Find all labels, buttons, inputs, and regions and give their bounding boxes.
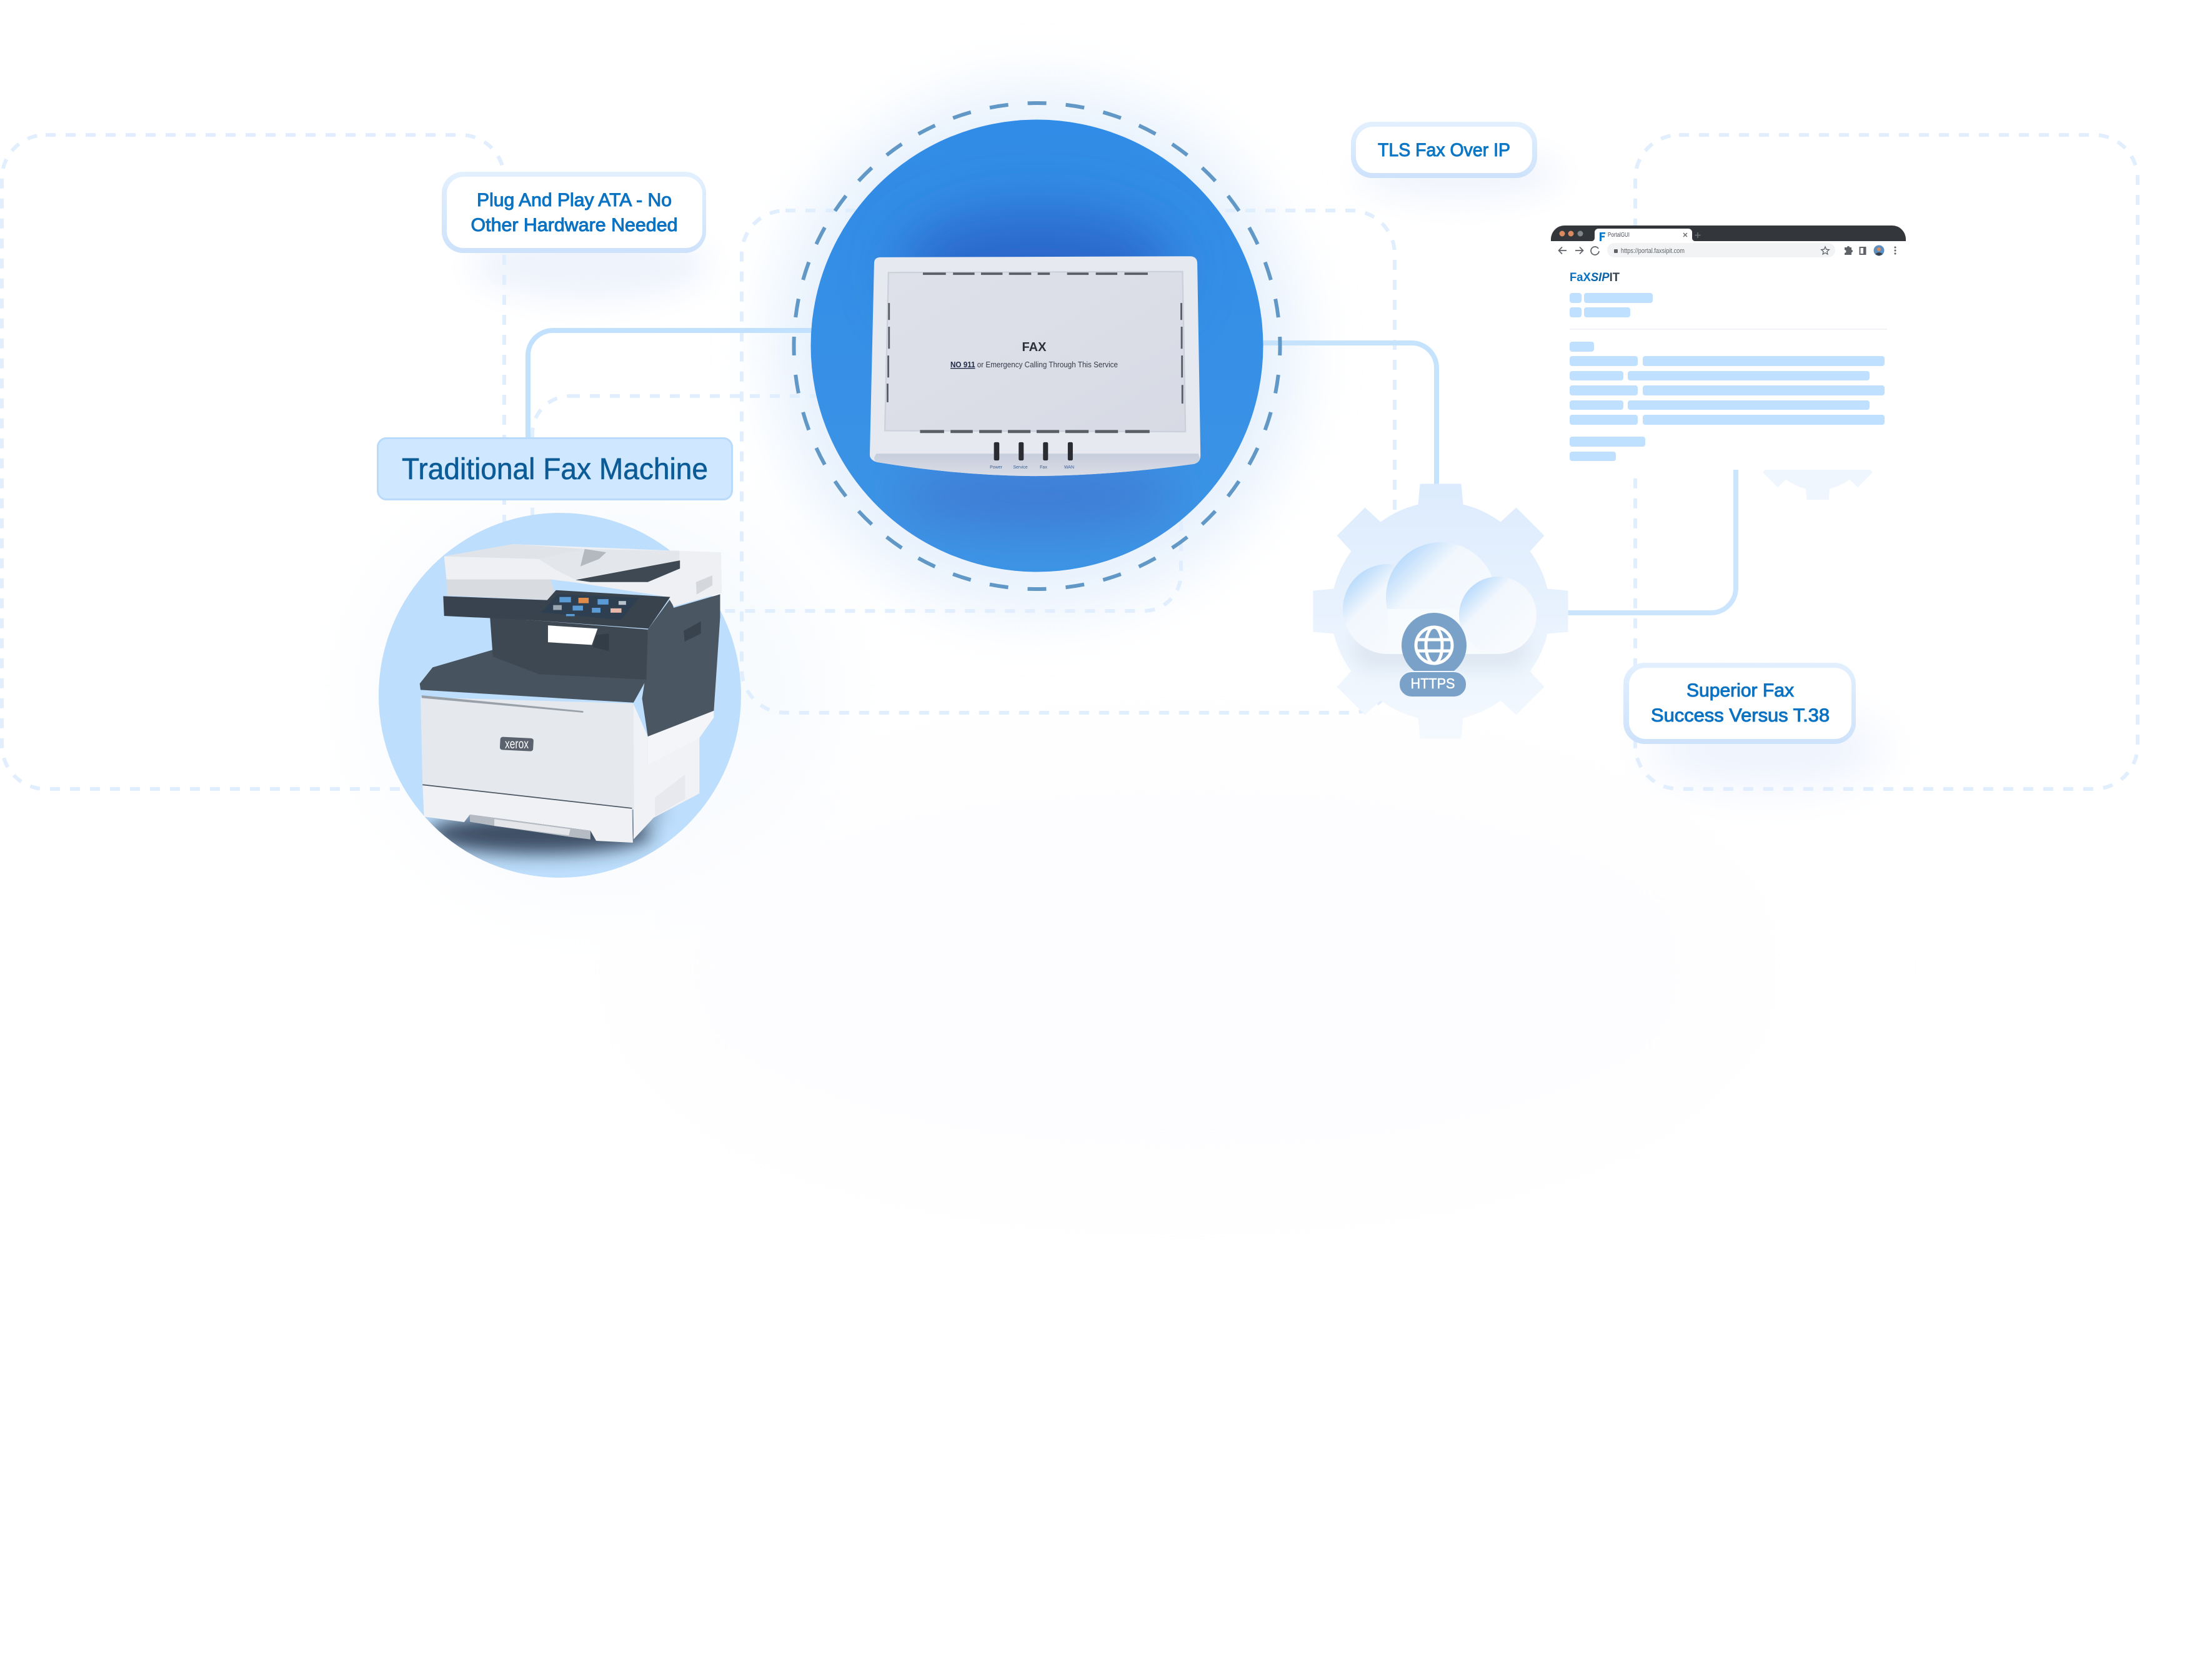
gear [1313,483,1568,738]
placeholder content bars [1570,293,1885,461]
device print: FAX: FAX [1022,340,1047,354]
circle shading [900,209,1175,531]
icon: globe [1402,613,1467,678]
window frame [1551,226,1906,470]
device LED labels: WAN [1064,465,1074,470]
callout: plug and play [442,172,706,253]
xerox logo: xerox [505,737,529,751]
cloud shadow [1353,631,1528,670]
toolbar icons [1821,245,1896,256]
dashed panel: far right [1635,135,2138,789]
url: https://portal.faxsipit.com [1621,247,1685,255]
cloud [1343,542,1537,654]
dashed ring [794,103,1280,589]
connector: fax machine to ATA [528,330,819,440]
callout: superior fax success [1623,663,1856,744]
dashed panel: centre top [742,211,1395,713]
nav icons [1558,247,1599,255]
printer backdrop [379,513,741,878]
infographic canvas [0,76,2140,878]
HTTPS badge: HTTPS [1411,675,1455,692]
device LED labels [990,465,1074,470]
callout: TLS fax over IP: TLS Fax Over IP [1378,140,1510,161]
lock icon [1614,249,1618,253]
dashed panel: far left [2,135,504,789]
device LED labels: Fax [1040,465,1047,470]
blue circle [811,120,1263,572]
ATA device on blue circle [794,103,1280,589]
printer body [420,544,722,843]
callout: superior fax success: Superior Fax [1686,680,1794,701]
device LED labels: Power [990,465,1003,470]
callout: plug and play: Other Hardware Needed [471,215,677,236]
device LED labels: Service [1013,465,1028,470]
HTTPS badge [1399,672,1467,697]
dashed panel: centre lower [532,396,1181,611]
FAXSIPIT logo: FaXSIPIT [1570,271,1620,284]
heading label: traditional fax machine: Traditional Fax Machine [402,453,708,486]
connector: cloud to browser [1525,465,1736,613]
gear with cloud and HTTPS badge [1313,483,1568,738]
device print: warning: NO 911 or Emergency Calling Through This Service [950,360,1118,369]
printer circle with fax machine [379,513,741,878]
window dots [1560,231,1583,236]
tab close and new tab [1683,232,1701,238]
heading label: traditional fax machine [377,439,732,500]
callout: superior fax success: Success Versus T.38 [1651,705,1830,726]
tab bar [1551,226,1906,241]
gear behind browser [1750,365,1885,500]
address bar [1607,243,1835,257]
printer shadow [426,793,662,854]
browser window [1551,226,1906,470]
tab title: PortalGUI [1608,232,1630,239]
callout: TLS fax over IP [1351,122,1537,178]
connector: ATA to cloud [1259,343,1437,500]
active tab [1592,229,1695,241]
callout: plug and play: Plug And Play ATA - No [477,190,672,211]
tab favicon [1600,232,1605,241]
background glows [362,84,1884,1187]
device body [870,256,1200,476]
